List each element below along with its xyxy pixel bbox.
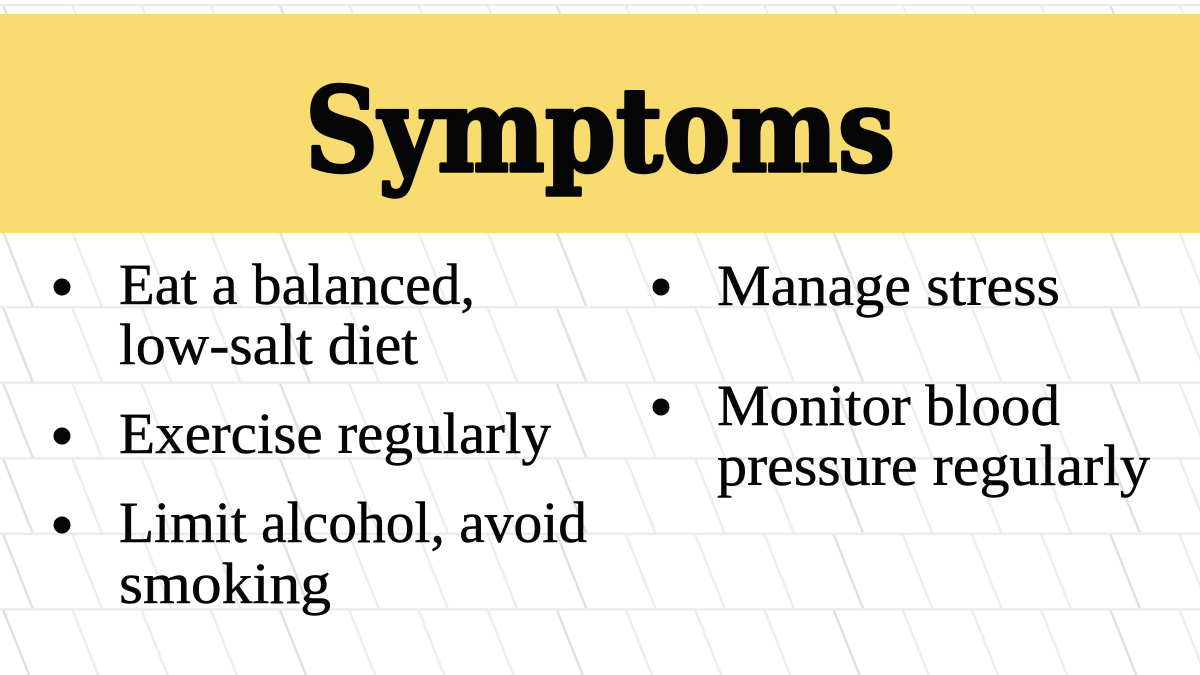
bullet: monitor blood pressure (652, 373, 1150, 498)
bullet: balanced diet: Eat a balanced, (119, 252, 475, 317)
banner background (0, 14, 1200, 233)
left bullet list (54, 252, 587, 616)
title: Symptoms (305, 63, 895, 199)
right bullet list (652, 253, 1150, 498)
bullet: balanced diet: low-salt diet (119, 312, 418, 377)
bullet: balanced diet (54, 252, 475, 377)
bullet: monitor blood pressure: pressure regularly (717, 433, 1150, 498)
bullet: alcohol and smoking (54, 490, 587, 616)
bullet: alcohol and smoking: Limit alcohol, avoid (119, 490, 587, 555)
bullet: monitor blood pressure: Monitor blood (717, 373, 1060, 438)
bullet: exercise: Exercise regularly (119, 401, 551, 466)
bullet: alcohol and smoking: smoking (119, 551, 331, 616)
bullet: manage stress: Manage stress (717, 253, 1060, 318)
